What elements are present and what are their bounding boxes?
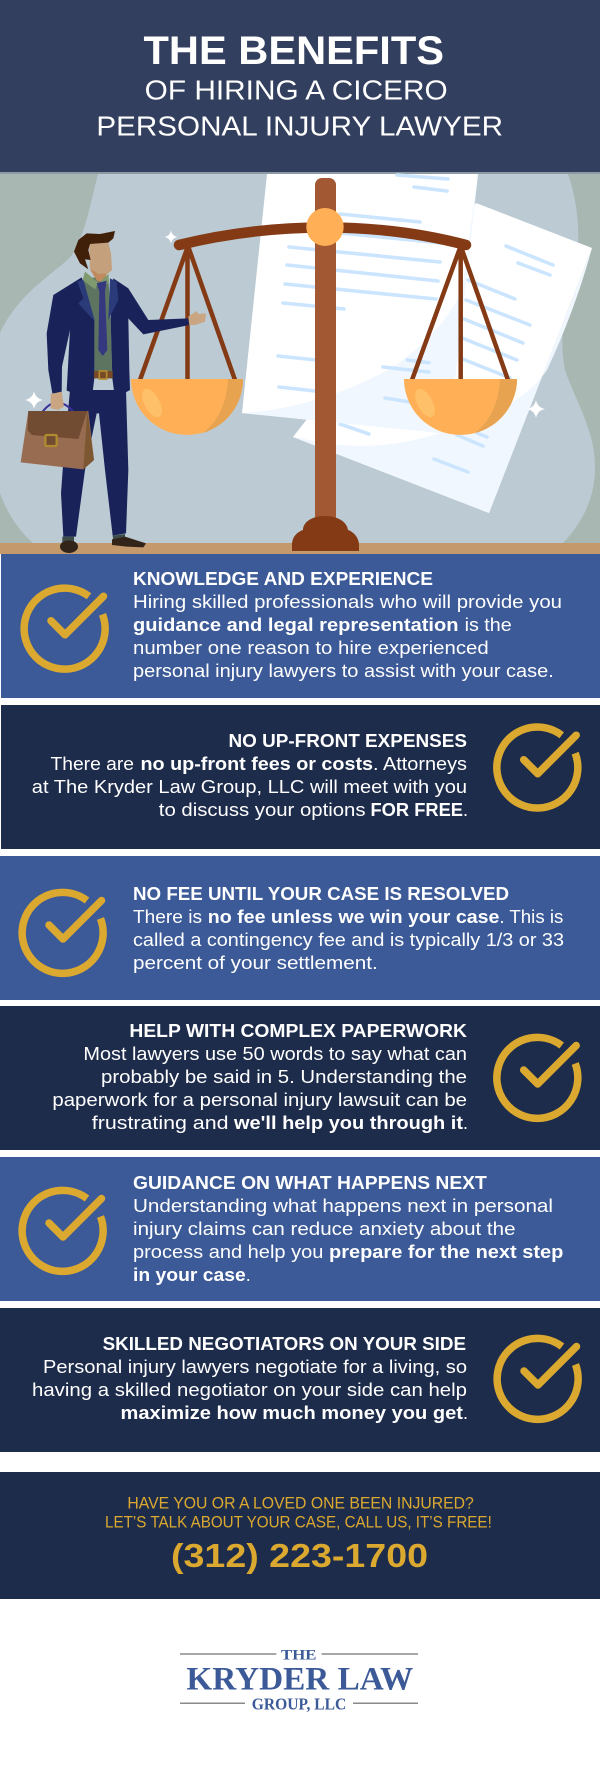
text block xyxy=(133,569,562,681)
title: PERSONAL INJURY LAWYER xyxy=(96,110,503,141)
text block: injury claims can reduce anxiety about the xyxy=(133,1219,516,1239)
icon: check circle xyxy=(497,727,578,808)
neck xyxy=(90,269,108,283)
text block: guidance and legal representation xyxy=(133,615,458,635)
text block: NO UP-FRONT EXPENSES xyxy=(228,731,467,751)
text block: There are xyxy=(50,754,134,774)
panel: knowledge and experience xyxy=(1,554,600,698)
face xyxy=(89,243,112,274)
text block: . Attorneys xyxy=(373,754,467,774)
icon: check circle xyxy=(497,1338,578,1419)
call to action text xyxy=(105,1495,492,1532)
text block: is the xyxy=(465,615,512,635)
phone number: (312) 223-1700 xyxy=(171,1537,428,1574)
text block: SKILLED NEGOTIATORS ON YOUR SIDE xyxy=(103,1334,466,1354)
text block: KNOWLEDGE AND EXPERIENCE xyxy=(133,569,433,589)
lapels xyxy=(77,278,118,322)
text block: prepare for the next step xyxy=(329,1242,563,1262)
scales of justice xyxy=(131,178,517,551)
left pan xyxy=(131,379,243,435)
panel: skilled negotiators on your side xyxy=(0,1308,600,1452)
text block: GUIDANCE ON WHAT HAPPENS NEXT xyxy=(133,1173,487,1193)
text block: at The Kryder Law Group, LLC will meet with you xyxy=(32,777,467,797)
text block xyxy=(32,1334,468,1423)
hair xyxy=(74,231,115,269)
sparkles xyxy=(25,230,545,418)
shoes xyxy=(112,537,146,547)
right pan strings xyxy=(412,246,508,380)
text block: process and help you xyxy=(133,1242,323,1262)
tie xyxy=(97,281,107,356)
text block: . xyxy=(463,800,468,820)
floor xyxy=(0,543,600,554)
left hand xyxy=(51,392,64,410)
socks xyxy=(62,534,125,543)
text block: . xyxy=(463,1113,468,1133)
call to action panel xyxy=(0,1472,600,1599)
text block: There is xyxy=(133,907,202,927)
text block: Understanding what happens next in personal xyxy=(133,1196,553,1216)
logo: The Kryder Law Group, LLC xyxy=(180,1647,418,1713)
collar xyxy=(83,272,109,289)
right hand xyxy=(188,311,206,325)
text block xyxy=(133,884,564,973)
text block: Personal injury lawyers negotiate for a living, so xyxy=(43,1357,467,1377)
jacket left side and arm xyxy=(47,277,94,400)
shirt xyxy=(83,277,112,378)
icon: check circle xyxy=(24,588,105,669)
panel: no up-front expenses xyxy=(1,705,600,849)
background blob xyxy=(0,174,595,543)
text block: we'll help you through it xyxy=(233,1113,463,1133)
text block: maximize how much money you get xyxy=(120,1403,463,1423)
logo: The Kryder Law Group, LLC: GROUP, LLC xyxy=(252,1694,346,1713)
pants xyxy=(61,390,128,537)
text block: . xyxy=(246,1265,251,1285)
text block: percent of your settlement. xyxy=(133,953,378,973)
logo: The Kryder Law Group, LLC: THE xyxy=(281,1647,316,1663)
header panel xyxy=(0,0,600,172)
title xyxy=(96,29,503,141)
text block: Hiring skilled professionals who will provide you xyxy=(133,592,562,612)
beam xyxy=(179,228,466,245)
jacket right side and arm xyxy=(111,278,189,398)
text block: probably be said in 5. Understanding the xyxy=(101,1067,467,1087)
text block xyxy=(52,1021,468,1133)
text block: FOR FREE xyxy=(370,800,463,820)
text block: personal injury lawyers to assist with your case. xyxy=(133,661,554,681)
text block: number one reason to hire experienced xyxy=(133,638,489,658)
illustration: lawyer and scales of justice xyxy=(0,172,600,554)
briefcase xyxy=(21,402,94,469)
panel: help with complex paperwork xyxy=(0,1006,600,1150)
icon: check circle xyxy=(22,892,103,973)
call to action text: HAVE YOU OR A LOVED ONE BEEN INJURED? xyxy=(127,1495,474,1513)
belt xyxy=(94,371,113,379)
left pan strings xyxy=(140,246,235,380)
icon: check circle xyxy=(497,1037,578,1118)
text block: . xyxy=(463,1403,468,1423)
document back xyxy=(293,203,592,513)
panel: guidance on what happens next xyxy=(0,1157,600,1301)
icon: check circle xyxy=(22,1190,103,1271)
right pan xyxy=(404,379,517,435)
text block: to discuss your options xyxy=(159,800,366,820)
document front xyxy=(242,174,478,434)
panel: no fee until your case is resolved xyxy=(0,856,600,1000)
text block: HELP WITH COMPLEX PAPERWORK xyxy=(129,1021,467,1041)
text block: no fee unless we win your case xyxy=(208,907,499,927)
text block: in your case xyxy=(133,1265,246,1285)
text block: no up-front fees or costs xyxy=(140,754,373,774)
text block: called a contingency fee and is typically 1/3 or 33 xyxy=(133,930,564,950)
knob xyxy=(306,208,344,246)
text block: frustrating and xyxy=(92,1113,228,1133)
text block: Most lawyers use 50 words to say what can xyxy=(83,1044,467,1064)
text block xyxy=(32,731,468,820)
lawyer figure xyxy=(21,231,206,553)
pillar xyxy=(315,178,336,523)
title: THE BENEFITS xyxy=(144,29,444,73)
title: OF HIRING A CICERO xyxy=(145,74,448,105)
text block xyxy=(133,1173,563,1285)
base xyxy=(292,516,359,551)
logo: The Kryder Law Group, LLC: KRYDER LAW xyxy=(186,1661,413,1697)
text block: paperwork for a personal injury lawsuit can be xyxy=(52,1090,467,1110)
text block: having a skilled negotiator on your side can help xyxy=(32,1380,467,1400)
text block: . This is xyxy=(499,907,563,927)
call to action text: LET’S TALK ABOUT YOUR CASE, CALL US, IT’S FREE! xyxy=(105,1514,492,1532)
text block: NO FEE UNTIL YOUR CASE IS RESOLVED xyxy=(133,884,509,904)
